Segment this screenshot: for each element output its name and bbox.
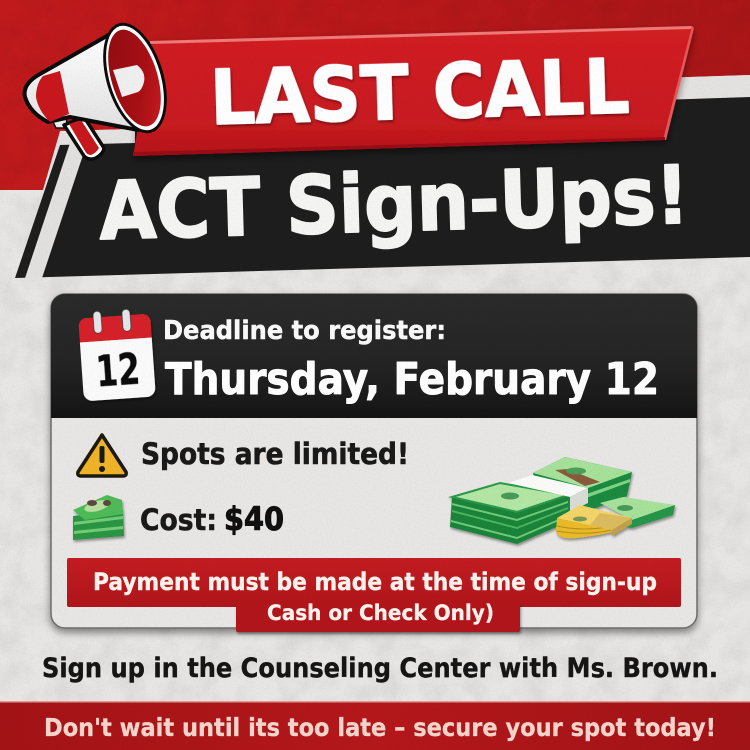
text: deadline label: Deadline to register: <box>163 316 446 346</box>
footer: red strip with call to action <box>0 701 750 750</box>
banner: red LAST CALL plate <box>133 26 694 156</box>
banner heading: LAST CALL: LAST CALL <box>209 42 630 142</box>
text: cash or check: Cash or Check Only) <box>267 601 494 625</box>
icon: calendar showing 12: 12 <box>94 344 142 397</box>
icon: megaphone <box>25 15 179 159</box>
icon: stacks of cash and coins <box>450 457 675 544</box>
text: spots are limited: Spots are limited! <box>141 437 409 471</box>
icon: small bill stack <box>73 495 124 540</box>
text: cost amount: $40 <box>224 500 284 538</box>
callout: payment requirement <box>67 558 681 632</box>
background: red textured header <box>0 0 750 190</box>
text: cost label: Cost: <box>140 503 217 537</box>
icon: warning triangle <box>78 435 126 476</box>
icon: calendar showing 12 <box>78 308 156 401</box>
text: payment line: Payment must be made at the time of sign-up <box>93 568 657 596</box>
main title: ACT Sign-Ups!: ACT Sign-Ups! <box>98 149 690 258</box>
header band: black ribbon with white stripes <box>15 75 750 278</box>
text: deadline date: Thursday, February 12 <box>165 354 659 405</box>
panel: registration details <box>51 294 697 632</box>
